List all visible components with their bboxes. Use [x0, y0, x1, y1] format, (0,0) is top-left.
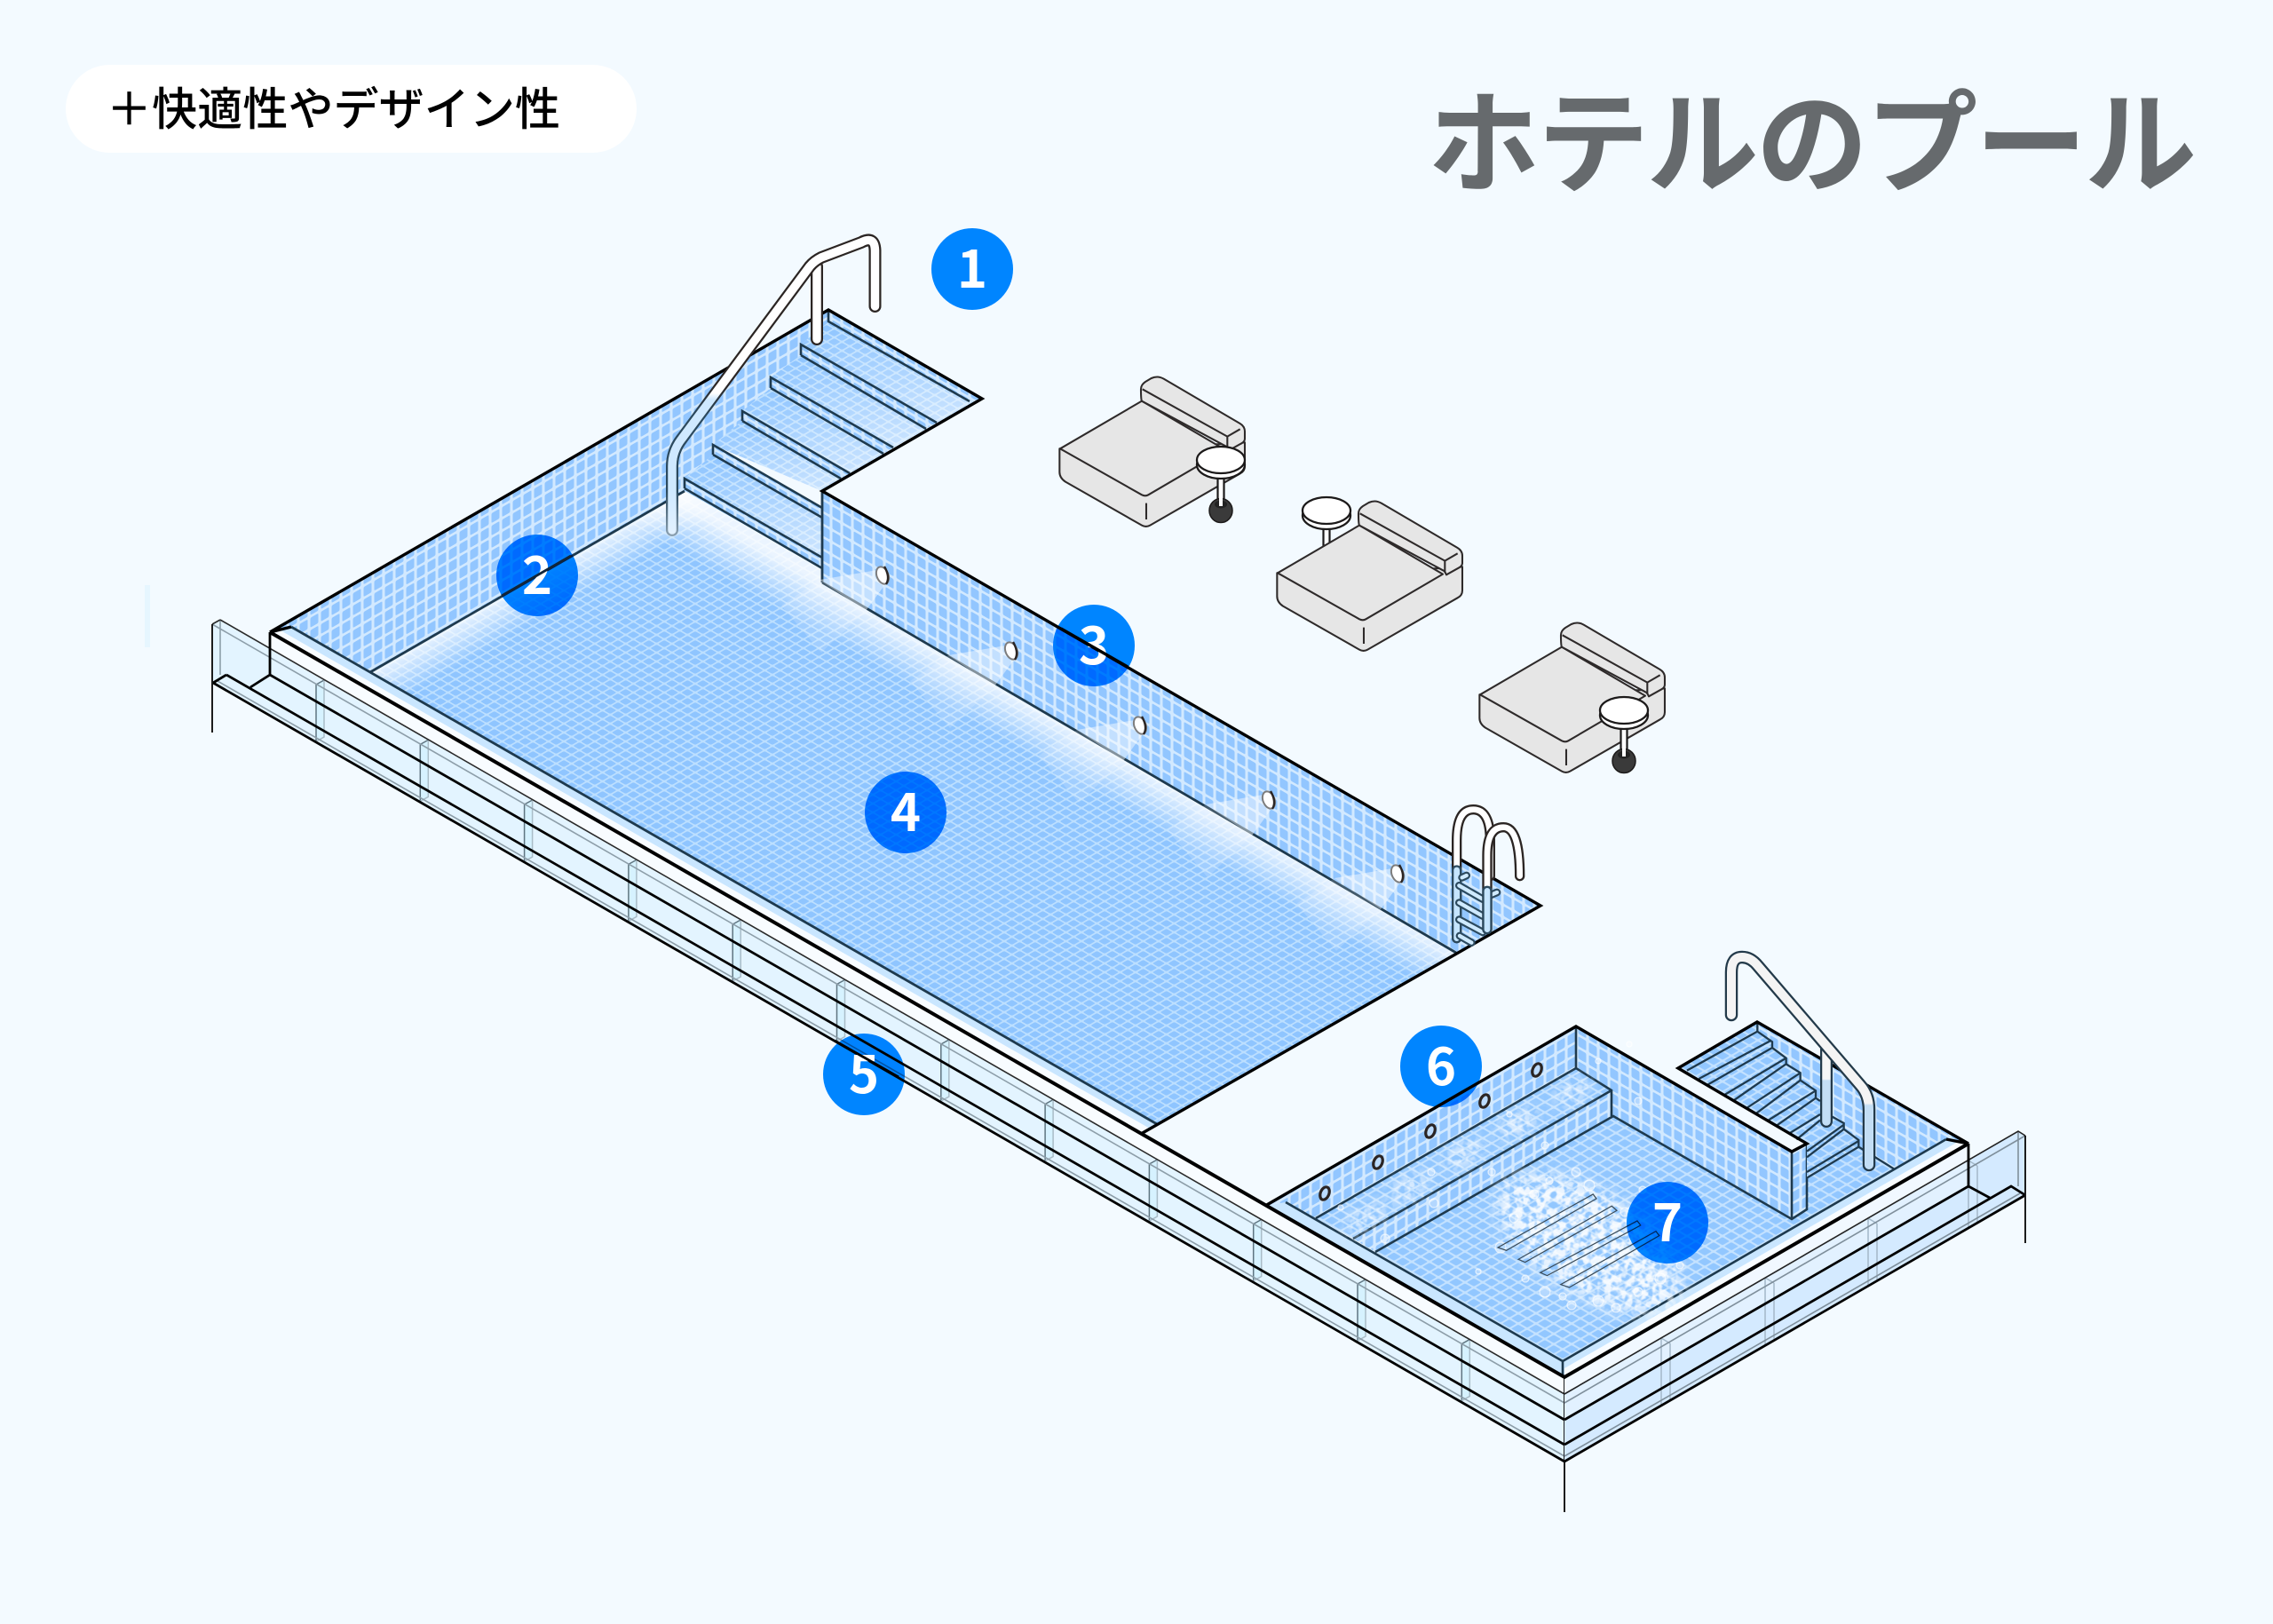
main pool: floor tiles — [370, 491, 1456, 1124]
jet pool: thick outline — [1265, 1022, 1968, 1206]
marker 1: 1 — [957, 228, 987, 303]
marker 4 — [865, 772, 946, 853]
jet pool: walls — [1265, 1022, 1968, 1375]
side table B — [1303, 497, 1350, 557]
main pool: right wall tiles — [822, 491, 1540, 953]
main pool: stairs — [685, 310, 982, 568]
marker 4: 4 — [891, 772, 921, 846]
main pool: interior lines — [291, 491, 1456, 1124]
side table C — [1600, 697, 1648, 772]
front coping thick edge — [270, 632, 1968, 1377]
marker 6: 6 — [1426, 1026, 1456, 1100]
jet pool: stairs — [1678, 1022, 1894, 1178]
glass fence: right front — [1564, 1131, 2025, 1462]
marker 5 — [823, 1034, 905, 1115]
marker 3: 3 — [1079, 605, 1109, 679]
lounger B — [1277, 501, 1462, 651]
marker 5: 5 — [849, 1034, 879, 1108]
main pool: front ledge strip — [270, 627, 1157, 1134]
main pool: stair handrail — [672, 240, 875, 530]
marker 2: 2 — [522, 535, 552, 609]
jet pool: wall nozzles — [1319, 1062, 1543, 1201]
marker 2 — [496, 535, 578, 616]
side table A — [1197, 447, 1245, 522]
marker 7 — [1627, 1182, 1708, 1264]
main pool: thick outline — [270, 310, 1540, 1134]
jet pool: bubbles and jets — [1338, 1042, 1706, 1343]
main pool: wall lights and beams — [781, 565, 1406, 951]
faint vertical mark — [145, 585, 150, 647]
badge: category label — [66, 65, 637, 153]
main pool — [270, 240, 1540, 1134]
badge: category label: ＋快適性やデザイン性 — [107, 73, 560, 139]
marker 6 — [1400, 1026, 1482, 1107]
lounger C — [1479, 622, 1665, 772]
marker 3 — [1053, 605, 1135, 686]
main pool: floor glow — [370, 491, 1456, 1124]
jet pool: handrail — [1731, 957, 1869, 1165]
jet pool: ledge strips — [1265, 1139, 1968, 1377]
glass fence: left front — [212, 620, 1564, 1512]
main pool: left wall tiles — [270, 310, 828, 672]
marker 7: 7 — [1652, 1182, 1683, 1256]
main pool: ladder — [1457, 810, 1520, 943]
lounger A — [1059, 376, 1245, 527]
jet pool — [1265, 957, 1968, 1377]
jet pool: floor tiles — [1375, 1116, 1894, 1361]
marker 1 — [931, 228, 1013, 310]
jet pool: floor jet slots — [1498, 1194, 1659, 1287]
title: ホテルのプール — [1428, 55, 2197, 217]
